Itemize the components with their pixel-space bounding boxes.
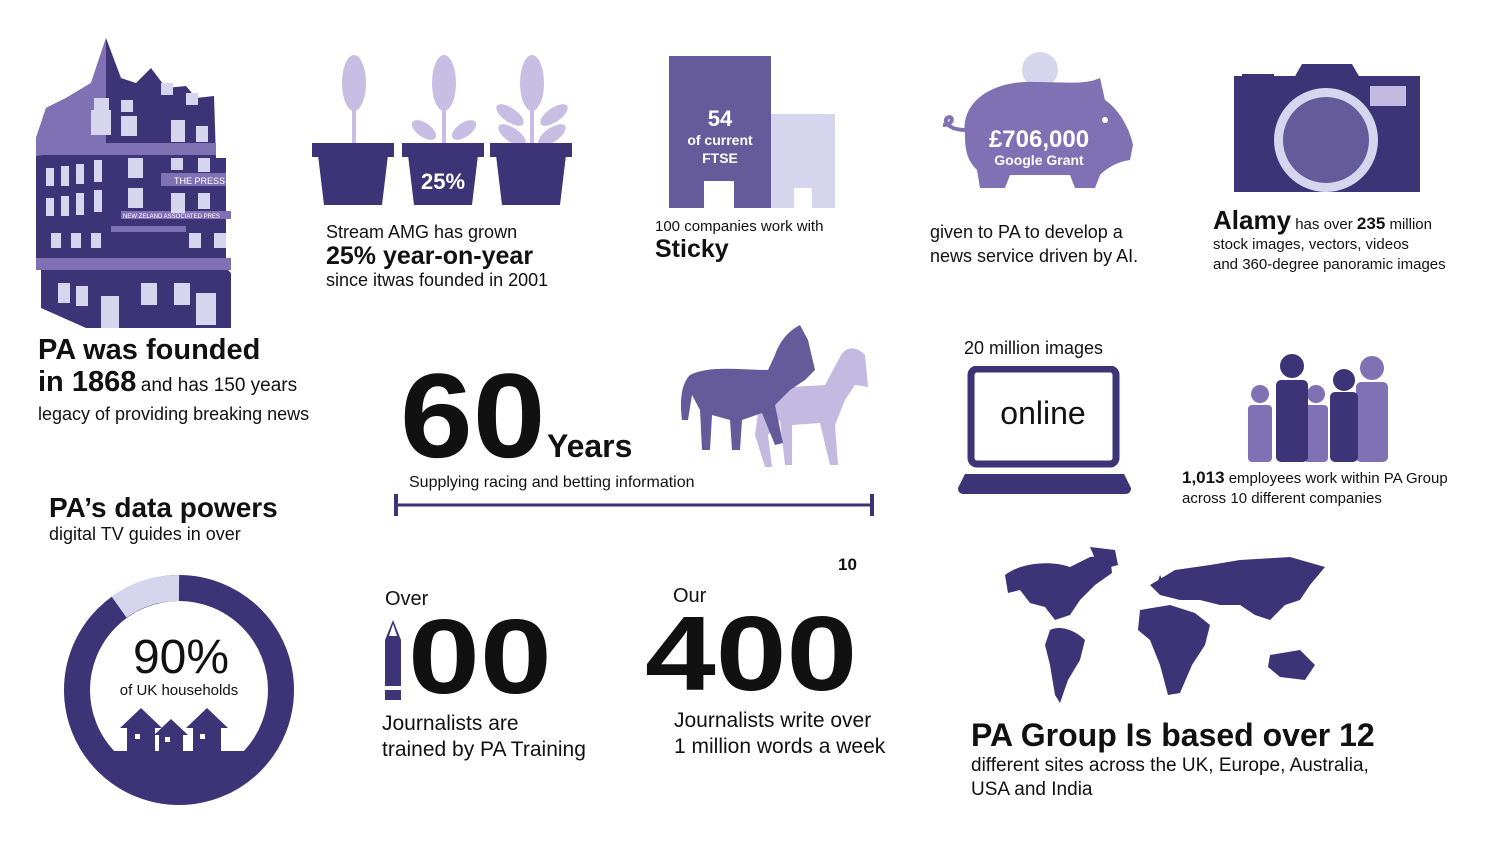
text: PA founded: PA was founded: [38, 334, 260, 366]
text: PA Group sites: PA Group Is based over 12: [971, 717, 1375, 753]
icon: building: NEW ZELAND ASSOCIATED PRES: [123, 214, 220, 220]
icon: building: THE PRESS: [174, 176, 225, 186]
chart: donut 90%: [64, 575, 294, 805]
icon: FTSE buildings: FTSE: [702, 150, 738, 166]
icon: piggy bank: £706,000: [989, 126, 1089, 153]
text: Google grant: given to PA to develop a: [930, 222, 1123, 242]
text: 60 years: Supplying racing and betting information: [409, 474, 695, 491]
text: Sticky: 100 companies work with: [655, 218, 823, 235]
icon: world map: [1005, 547, 1325, 703]
icon: horses: [680, 325, 868, 467]
icon: piggy bank: [943, 52, 1133, 188]
chart: donut 90%: of UK households: [120, 682, 238, 699]
text: Stream AMG: Stream AMG has grown: [326, 222, 517, 242]
text: 20 million images: 20 million images: [964, 338, 1103, 358]
text: Alamy: stock images, vectors, videos: [1213, 236, 1409, 253]
icon: laptop: [958, 366, 1131, 494]
text: 400 journalists: Journalists write over: [674, 709, 871, 732]
text: Google grant: [930, 222, 1138, 266]
text: Stream AMG: since itwas founded in 2001: [326, 270, 548, 290]
text: PA Group sites: [971, 717, 1375, 800]
text: employees: across 10 different companies: [1182, 490, 1382, 507]
text: 10: [838, 555, 857, 574]
text: 400 journalists: Our: [673, 585, 706, 607]
text: 400 journalists: [645, 555, 886, 758]
text: Sticky: [655, 218, 823, 263]
text: 60 years: 60: [400, 349, 545, 483]
text: PA founded: [38, 334, 309, 424]
text: Google grant: news service driven by AI.: [930, 246, 1138, 266]
icon: people group: [1248, 354, 1388, 462]
text: Stream AMG: [326, 222, 548, 290]
icon: building: [36, 38, 231, 328]
text: Over 100 journalists: [382, 588, 586, 761]
icon: FTSE buildings: [669, 56, 835, 208]
icon: plant pots: [312, 55, 572, 205]
text: Stream AMG: 25% year-on-year: [326, 242, 533, 270]
text: data powers: digital TV guides in over: [49, 524, 241, 544]
icon: plant pots: 25%: [421, 169, 465, 194]
text: Over 100 journalists: Over: [385, 588, 428, 610]
text: Alamy: and 360-degree panoramic images: [1213, 256, 1446, 273]
text: 400 journalists: 400: [645, 595, 857, 713]
text: Sticky: Sticky: [655, 235, 729, 263]
text: employees: [1182, 468, 1448, 507]
icon: FTSE buildings: 54: [708, 106, 733, 131]
text: data powers: PA’s data powers: [49, 492, 278, 523]
text: 60 years: Years: [547, 428, 632, 464]
icon: FTSE buildings: of current: [687, 132, 753, 148]
text: Alamy: Alamy has over 235 million: [1213, 205, 1432, 235]
text: Over 100 journalists: Journalists are: [382, 712, 519, 735]
text: PA founded: legacy of providing breaking news: [38, 404, 309, 424]
text: PA founded: in 1868 and has 150 years: [38, 366, 297, 398]
text: Over 100 journalists: 00: [408, 598, 552, 716]
text: employees: 1,013 employees work within PA Group: [1182, 468, 1448, 487]
text: PA Group sites: different sites across the UK, Europe, Australia,: [971, 755, 1369, 776]
text: data powers: [49, 492, 278, 544]
text: 60 years: [400, 349, 695, 491]
timeline bar: [394, 494, 874, 516]
text: Alamy: [1213, 205, 1446, 273]
text: 400 journalists: 1 million words a week: [674, 735, 885, 758]
text: PA Group sites: USA and India: [971, 779, 1092, 800]
icon: piggy bank: Google Grant: [994, 152, 1084, 168]
text: Over 100 journalists: trained by PA Training: [382, 738, 586, 761]
icon: camera: [1234, 64, 1420, 192]
icon: laptop: online: [1000, 395, 1086, 431]
chart: donut 90%: 90%: [133, 631, 229, 684]
